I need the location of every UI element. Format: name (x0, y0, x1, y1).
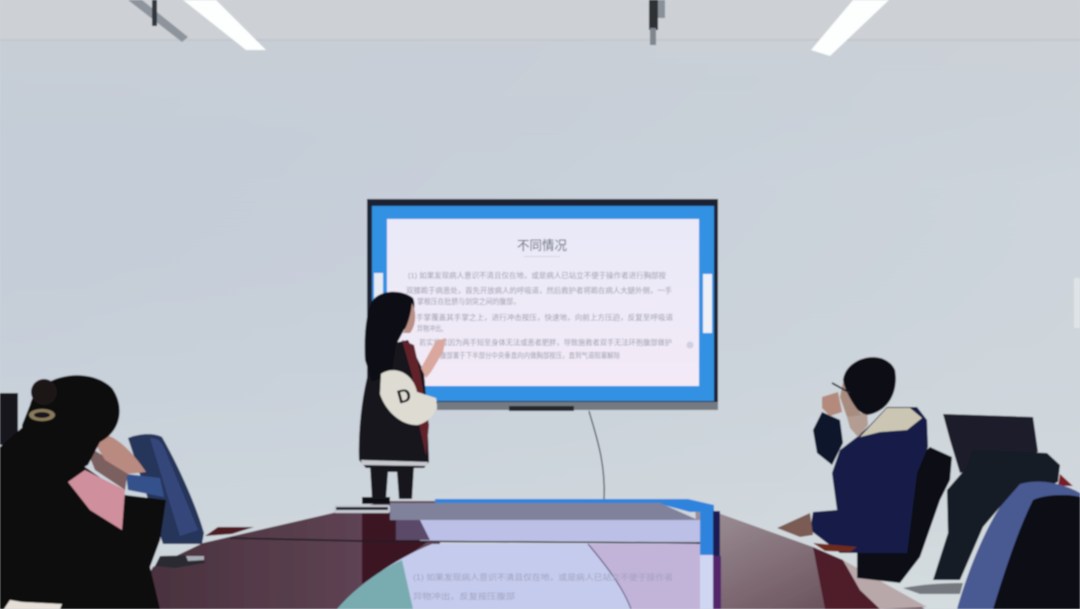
face (403, 303, 415, 333)
screen bezel (367, 199, 718, 404)
forearm and hand (421, 338, 446, 378)
slide title: 不同情况 (517, 238, 567, 253)
monitor, far left (0, 393, 18, 445)
table top left (130, 501, 440, 609)
blue cuff (126, 474, 164, 497)
wall edge marker right (1074, 278, 1080, 328)
hair (365, 292, 414, 382)
conference table (130, 499, 927, 609)
hand at face (822, 392, 842, 416)
ceiling light left (128, 0, 266, 50)
jacket (810, 407, 928, 553)
slide page button (686, 342, 694, 348)
man reflection (813, 547, 880, 609)
slide body text: 异物冲出。 (417, 323, 447, 333)
hand on table (777, 513, 813, 537)
screen reflection: slide on table right (588, 544, 700, 609)
slide body text (406, 270, 674, 360)
chair base (903, 583, 963, 594)
near chair cover blue (957, 482, 1080, 609)
screen reflection: blue edge (435, 499, 714, 512)
screen blue background (372, 206, 714, 401)
wooden chair arm (813, 543, 857, 552)
chair arm behind table (205, 527, 254, 536)
hand (92, 434, 146, 474)
right toolbar on screen (703, 274, 712, 333)
red scarf (402, 340, 429, 456)
man, right (777, 357, 928, 553)
presenter reflection fragment (396, 520, 430, 540)
screen reflection: grey band (390, 503, 698, 520)
soundbar slot (509, 406, 574, 411)
slide body text: 双膝跪于病患处，首先开放病人的呼吸道，然后救护者将跪在病人大腿外侧，一手 (406, 285, 672, 295)
glasses (832, 383, 850, 393)
phone on table by presenter (334, 505, 390, 513)
slide body text: 若实施者因为两手短至身体无法或患者肥胖，导致施救者双手无法环抱腹部做护 (419, 337, 672, 347)
chairs, right (857, 414, 1080, 609)
reflected slide text: (1) 如果发现病人意识不清且仅在地，或是病人已站立不便于操作者 (413, 572, 673, 582)
near chair dark back (993, 495, 1080, 609)
slide body text: 腹部置于下半部分中央垂直向内做胸部按压，直到气道阻塞解除 (440, 350, 620, 360)
chair red trim (1058, 474, 1073, 486)
teal reflection (337, 560, 413, 609)
legs (370, 465, 414, 499)
man's chair (857, 447, 952, 583)
dark reflection of presenter (362, 510, 430, 584)
table top right (695, 503, 925, 609)
head (843, 357, 896, 415)
curve line in reflection (588, 544, 631, 609)
slide body text: (1) 如果发现病人意识不清且仅在地，或是病人已站立不便于操作者进行胸部按 (408, 270, 666, 280)
neck (847, 412, 868, 437)
screen reflection: slide on table (338, 544, 631, 609)
screen bottom bar (437, 402, 718, 410)
slide page (387, 219, 699, 386)
letter D on sleeve: D (395, 385, 414, 409)
hem stripes (361, 460, 428, 466)
reflected slide text: 异物冲出，反复按压腹部 (413, 591, 515, 601)
ceiling fixture centre (649, 0, 665, 45)
middle chair (933, 450, 1060, 580)
dark sleeve (813, 412, 843, 465)
face shadow (85, 445, 128, 490)
dark strip next to blue (713, 511, 720, 556)
slide body text: 手掌覆盖其手掌之上，进行冲击按压，快速地，向前上方压迫，反复至呼吸道 (416, 312, 674, 322)
left toolbar on screen (374, 273, 383, 302)
pink blouse (68, 470, 125, 530)
blue chair, left (128, 434, 254, 544)
phone on table, left (155, 555, 205, 568)
jacket body (359, 340, 429, 468)
slide body text: 掌根压在肚脐与剑突之间的腹部， (417, 296, 520, 306)
display: wall-mounted screen (367, 199, 718, 411)
paper at bottom (4, 600, 62, 609)
hood lining (860, 408, 922, 437)
screen reflection: light band (420, 520, 700, 542)
face (840, 382, 862, 417)
reflected slide text (413, 572, 673, 601)
hair bun (31, 379, 57, 405)
ceiling (0, 0, 1080, 41)
hair (22, 375, 120, 480)
ceiling light right (811, 0, 889, 56)
hair clip (29, 409, 55, 421)
presenter (359, 292, 446, 504)
sleeve with letter D (380, 370, 437, 425)
seated woman, left (0, 375, 166, 609)
far chair back (943, 414, 1038, 473)
slide title underline (524, 256, 560, 257)
blue reflection strip (700, 505, 713, 555)
table seam (230, 538, 700, 543)
shoes (362, 497, 390, 504)
body (0, 425, 166, 609)
cable (589, 411, 604, 499)
